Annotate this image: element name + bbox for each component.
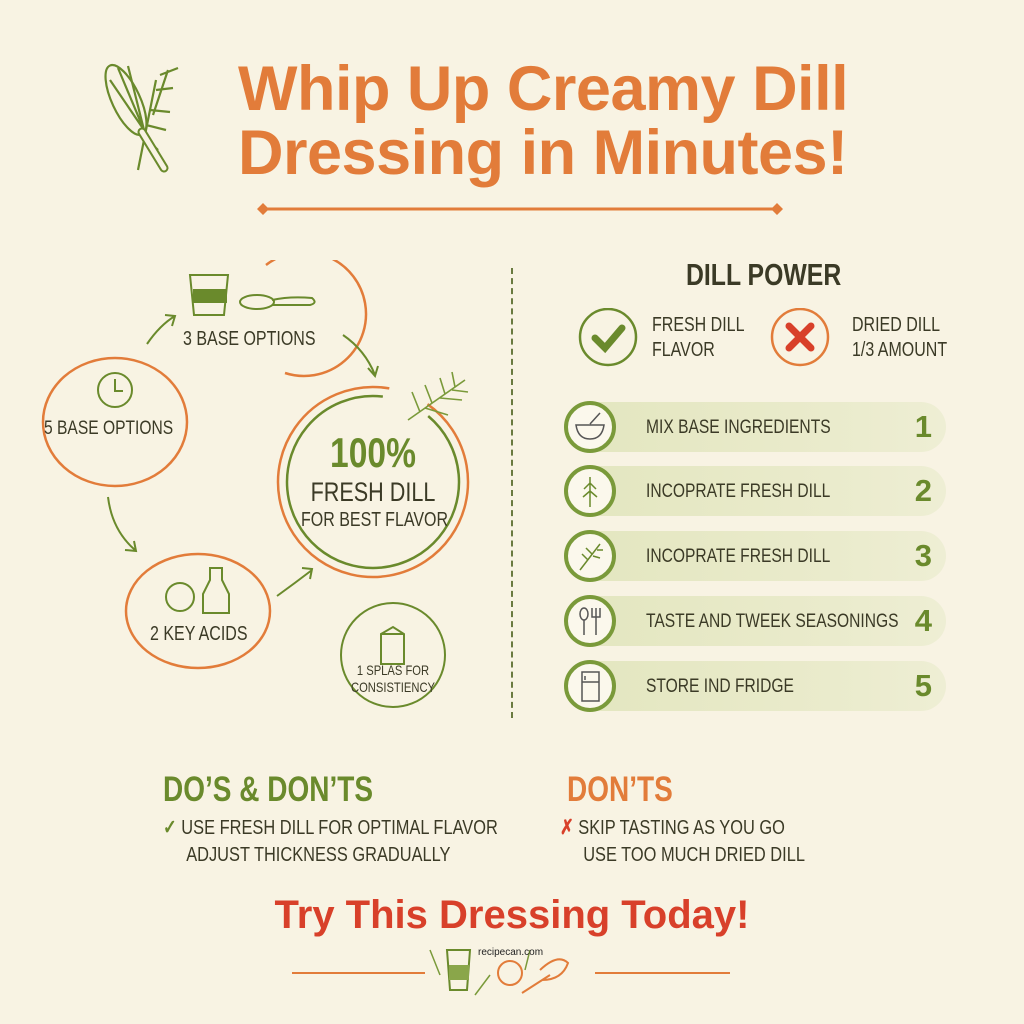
step 2 [568,466,946,516]
icon: cross [770,308,830,366]
list: dos [163,816,498,866]
list: dos: ✓ USE FRESH DILL FOR OPTIMAL FLAVOR [163,816,498,839]
big stat: FRESH DILL [311,477,435,507]
step 4 [568,596,946,646]
step 5 [568,661,946,711]
big stat [301,429,448,531]
label 5 base: 5 BASE OPTIONS [44,417,173,439]
heading: dill power: DILL POWER [686,257,841,292]
step 4: 4 [915,603,932,638]
text fresh dill: FRESH DILL [652,314,744,336]
panel: flow diagram [42,260,470,708]
step 2: INCOPRATE FRESH DILL [646,480,830,502]
heading: dos and donts: DO’S & DON’TS [163,770,373,809]
dashed divider [511,268,513,718]
step 1 [568,402,946,452]
list: donts: USE TOO MUCH DRIED DILL [583,843,805,866]
step 1: MIX BASE INGREDIENTS [646,416,831,438]
list: dos: ADJUST THICKNESS GRADUALLY [186,843,450,866]
label 1 splas: CONSISTIENCY [351,679,435,695]
watermark: recipecan.com [478,947,543,958]
text dried dill: DRIED DILL [852,314,940,336]
call to action: Try This Dressing Today! [275,893,749,937]
text fresh dill [652,314,744,361]
footer decoration [292,949,730,996]
text dried dill: 1/3 AMOUNT [852,339,947,361]
step 4: TASTE AND TWEEK SEASONINGS [646,610,899,632]
title [238,54,848,188]
step 5: 5 [915,668,932,703]
label 1 splas: 1 SPLAS FOR [357,662,429,678]
step 1: 1 [915,409,932,444]
title: Dressing in Minutes! [238,118,848,188]
step 3: 3 [915,538,932,573]
big stat: 100% [330,429,416,476]
text fresh dill: FLAVOR [652,339,715,361]
text dried dill [852,314,947,361]
icon: check [578,308,638,366]
step 3 [568,531,946,581]
big stat: FOR BEST FLAVOR [301,509,448,531]
title: Whip Up Creamy Dill [238,54,848,124]
title divider [257,203,783,215]
step 3: INCOPRATE FRESH DILL [646,545,830,567]
heading: donts: DON’TS [567,770,673,809]
step 2: 2 [915,473,932,508]
label 1 splas [351,662,435,695]
icon: whisk and dill [104,64,178,172]
list: donts: ✗ SKIP TASTING AS YOU GO [560,816,785,839]
list: donts [560,816,805,866]
step 5: STORE IND FRIDGE [646,675,794,697]
label 2 acids: 2 KEY ACIDS [150,623,248,645]
label 3 base: 3 BASE OPTIONS [183,328,315,350]
